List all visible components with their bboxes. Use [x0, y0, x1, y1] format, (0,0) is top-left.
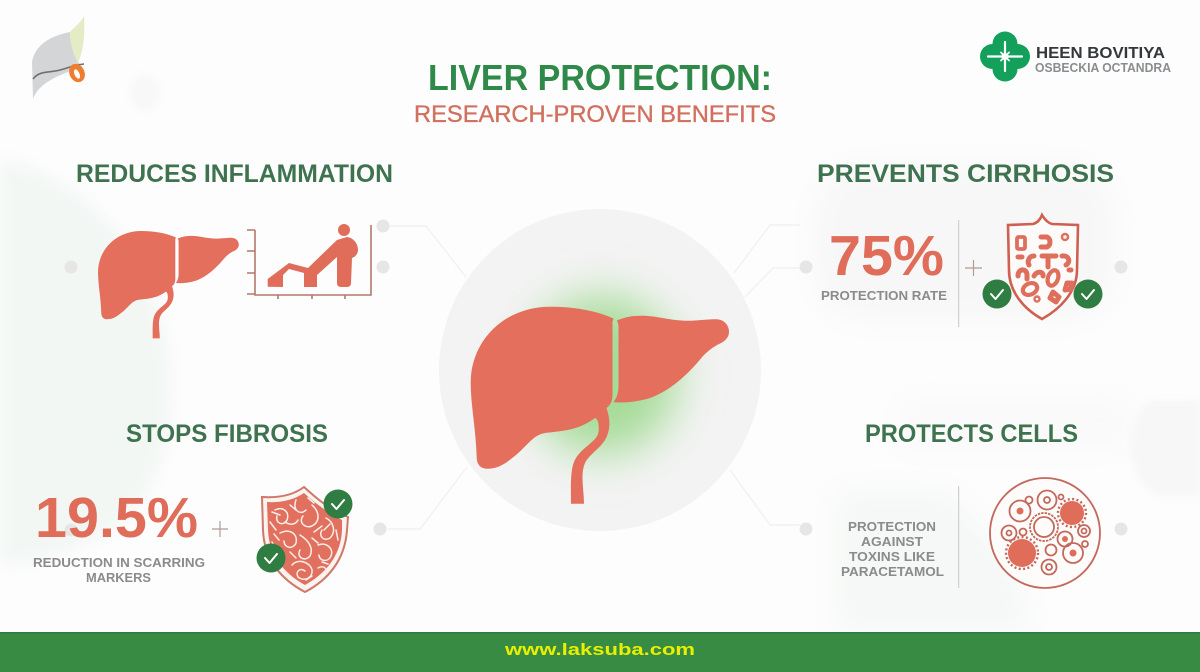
- icon: shield with damaged tissue: [982, 215, 1102, 319]
- stat: 75%: 75%: [829, 224, 944, 288]
- logo: leaf mark: [32, 16, 88, 99]
- stat caption: [33, 556, 205, 585]
- brand name: HEEN BOVITIYA: [1036, 45, 1165, 62]
- description: [841, 520, 944, 579]
- panel: prevents cirrhosis: [817, 160, 1114, 327]
- logo: Heen Bovitiya brand: [980, 32, 1171, 82]
- icon: liver: [98, 231, 239, 338]
- website url: www.laksuba.com: [504, 640, 695, 659]
- heading: STOPS FIBROSIS: [126, 420, 328, 448]
- check badge: [256, 544, 286, 572]
- stat caption: REDUCTION IN SCARRING: [33, 556, 205, 570]
- stat caption: MARKERS: [86, 571, 151, 585]
- check badge: [1074, 280, 1102, 308]
- stat: 19.5%: 19.5%: [35, 486, 198, 550]
- panel: reduces inflammation: [76, 160, 393, 338]
- heading: PROTECTS CELLS: [865, 420, 1078, 448]
- panel: stops fibrosis: [33, 420, 352, 592]
- central liver illustration: [439, 209, 761, 531]
- icon: green clover: [980, 32, 1030, 82]
- heading: PREVENTS CIRRHOSIS: [817, 160, 1114, 188]
- icon: shield with scar tissue: [256, 487, 352, 592]
- footer bar: [0, 632, 1200, 672]
- check badge: [982, 280, 1012, 308]
- title: LIVER PROTECTION:: [428, 57, 772, 98]
- stat caption: PROTECTION RATE: [821, 289, 947, 303]
- description: PROTECTION: [848, 520, 936, 534]
- divider: [958, 220, 959, 327]
- chart: rising trend with figure: [247, 224, 371, 299]
- description: TOXINS LIKE: [849, 550, 935, 564]
- plus sign: [965, 260, 982, 276]
- heading: REDUCES INFLAMMATION: [76, 160, 393, 188]
- icon: cells in a circle: [990, 478, 1100, 588]
- plus sign: [212, 521, 228, 537]
- check badge: [324, 490, 352, 518]
- subtitle: RESEARCH-PROVEN BENEFITS: [414, 101, 776, 128]
- description: AGAINST: [861, 535, 923, 549]
- panel: protects cells: [841, 420, 1100, 588]
- connector lines and dots: [64, 220, 1128, 536]
- divider: [958, 486, 959, 588]
- brand subtitle: OSBECKIA OCTANDRA: [1035, 61, 1171, 75]
- description: PARACETAMOL: [841, 565, 944, 579]
